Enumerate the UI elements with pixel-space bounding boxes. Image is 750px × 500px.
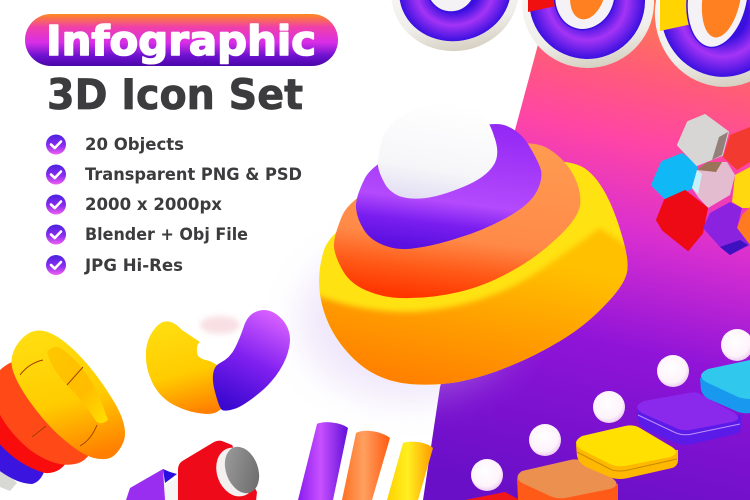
orange layer	[334, 143, 580, 298]
white cap	[378, 103, 497, 199]
torus: purple half	[213, 310, 290, 411]
hexagon: yellow right	[732, 167, 750, 208]
list item: Transparent PNG & PSD: Transparent PNG & PSD	[85, 165, 302, 184]
icon: hexagon cluster	[652, 115, 750, 255]
list item: JPG Hi-Res: JPG Hi-Res	[84, 256, 183, 275]
icon: top-left ring	[382, 0, 528, 61]
icon: cyan step	[700, 360, 750, 413]
soft hole shadow	[200, 316, 240, 334]
gradient diagonal panel	[423, 0, 750, 500]
purple layer	[356, 124, 541, 249]
hexagon: translucent centre	[692, 162, 735, 208]
icon: orange cylinder	[342, 431, 390, 500]
icon: red cube with button	[178, 441, 265, 500]
icon: yellow step	[576, 425, 678, 479]
icon: orange step	[517, 459, 618, 500]
ring: yellow outer	[11, 330, 125, 459]
hexagon: cyan	[652, 154, 697, 198]
icon: white balls	[471, 329, 750, 491]
hexagon: white	[678, 115, 728, 165]
icon: purple cylinder	[298, 422, 348, 500]
ring: red	[0, 395, 68, 473]
ring: seam lines	[20, 360, 97, 446]
soft shadow glow	[300, 240, 520, 400]
header pill	[25, 14, 338, 66]
icon: purple step	[637, 392, 741, 445]
yellow base layer	[319, 162, 628, 385]
icon: stacked rings	[0, 330, 125, 491]
icon: purple cube	[126, 469, 178, 500]
list item: JPG Hi-Res	[46, 255, 183, 275]
hexagon: purple	[703, 202, 750, 255]
list item: 2000 x 2000px: 2000 x 2000px	[85, 195, 222, 214]
icon: red step	[465, 492, 520, 500]
icon: top-middle ring	[512, 0, 664, 78]
ring: inner opening	[47, 347, 108, 423]
icon: top-right ring	[644, 0, 750, 98]
icon: yellow cylinder	[387, 442, 433, 500]
list item: Blender + Obj File: Blender + Obj File	[85, 225, 248, 244]
ring: blue	[0, 425, 44, 484]
hexagon: red	[657, 191, 707, 250]
ring: grey tip	[0, 466, 17, 491]
hexagon: orange right	[737, 207, 750, 245]
heading: 3D Icon Set: 3D Icon Set	[47, 70, 303, 119]
button: grey face	[219, 442, 265, 498]
list item: 20 Objects	[46, 134, 184, 154]
ring: orange	[0, 362, 92, 465]
button: white collar	[210, 442, 262, 500]
icon: split torus	[146, 310, 290, 414]
list item: 20 Objects: 20 Objects	[85, 135, 184, 154]
icon: central stacked blob	[300, 103, 650, 400]
hexagon: red right	[723, 127, 750, 170]
torus: yellow half	[146, 321, 229, 414]
feature list	[46, 134, 302, 275]
heading: Infographic: Infographic	[46, 17, 316, 65]
